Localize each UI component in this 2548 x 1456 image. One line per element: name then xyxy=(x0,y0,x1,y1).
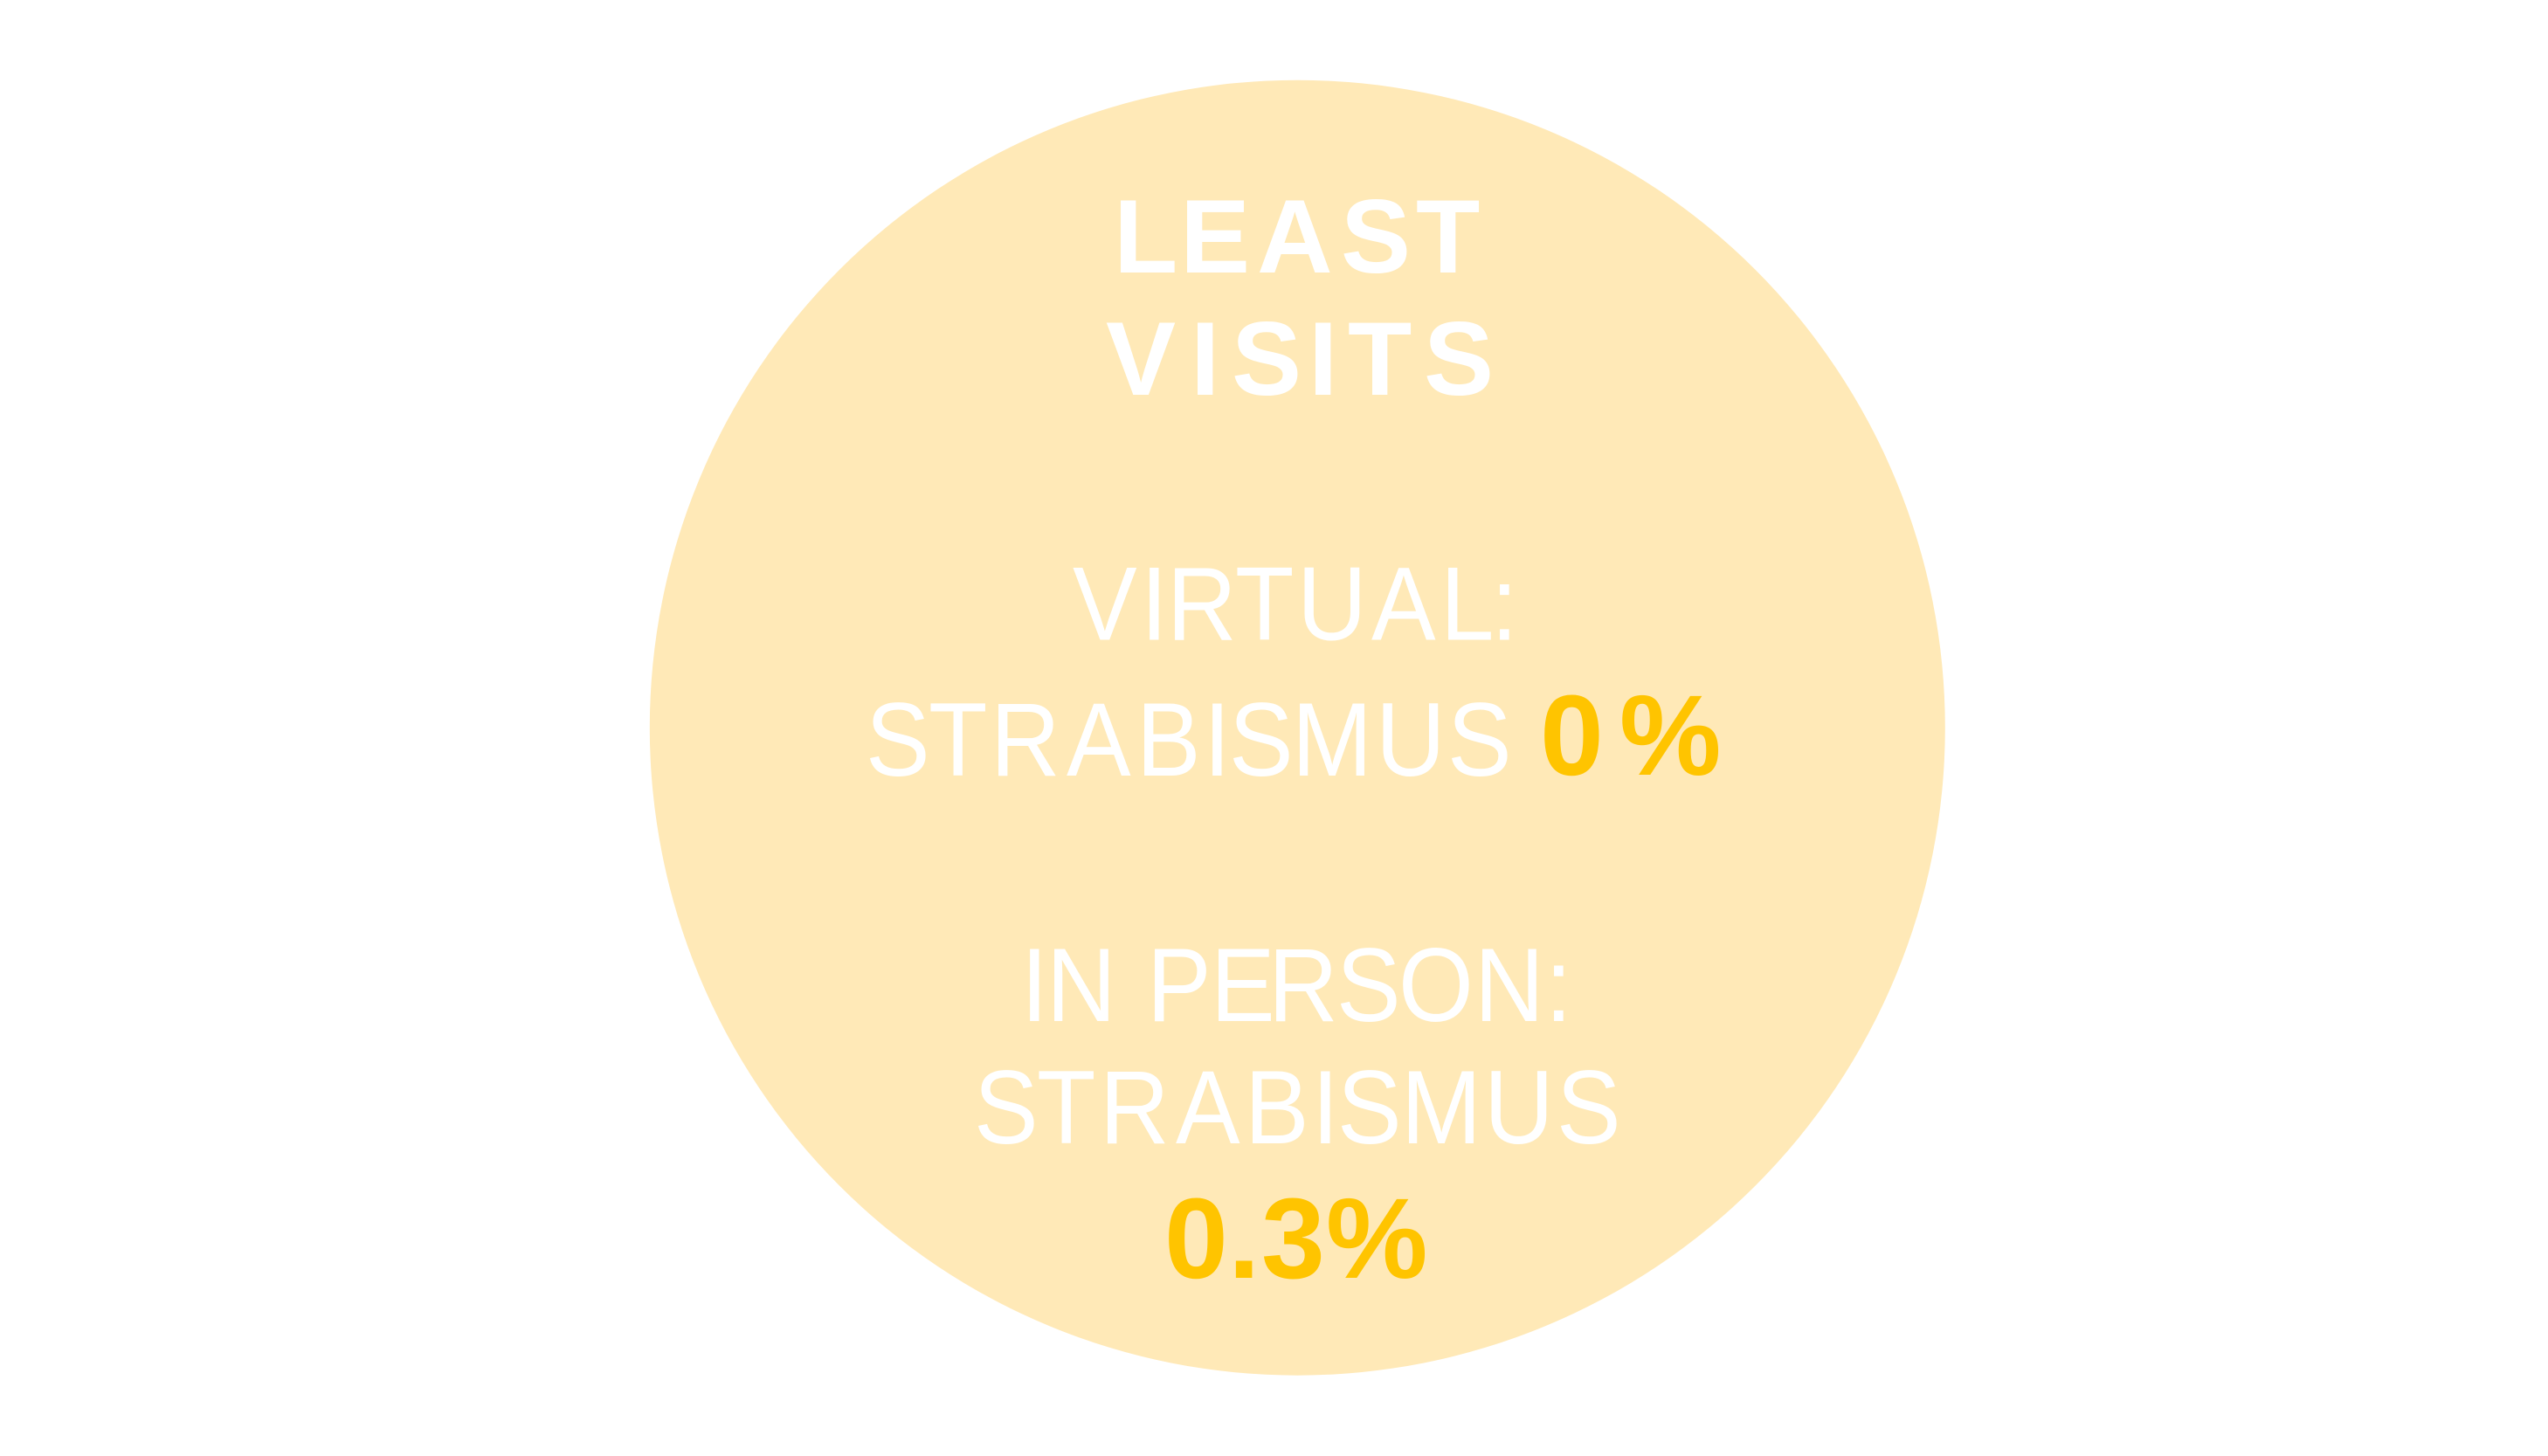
text block: in person: STRABISMUS xyxy=(974,1050,1621,1166)
heading: least visits: VISITS xyxy=(1106,300,1494,417)
text block: in person xyxy=(974,928,1621,1302)
stat: virtual strabismus 0%: 0% xyxy=(1540,671,1721,799)
heading: least visits: LEAST xyxy=(1114,178,1480,295)
text block: virtual: VIRTUAL: xyxy=(1073,546,1518,663)
panel: least visits circle xyxy=(650,80,1945,1376)
heading: least visits xyxy=(1106,178,1494,417)
text block: virtual xyxy=(866,546,1721,799)
text block: in person: IN PERSON: xyxy=(1021,928,1572,1044)
stat: in person strabismus 0.3%: 0.3% xyxy=(1164,1174,1427,1302)
text block: virtual: STRABISMUS xyxy=(866,682,1512,798)
